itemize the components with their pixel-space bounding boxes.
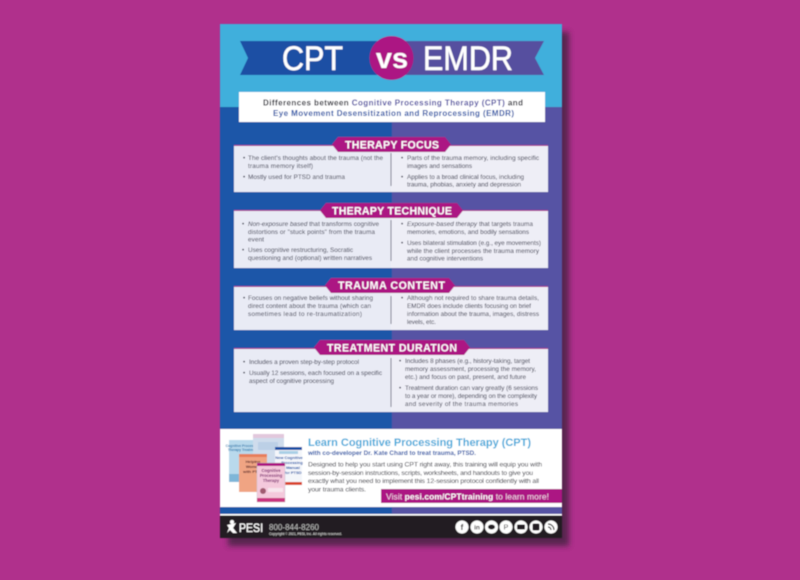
left text: • (243, 295, 245, 302)
subtitle line 1: Differences between Cognitive Processing Therapy (CPT) and (263, 98, 523, 108)
book: orange: with PTSD (242, 469, 263, 474)
promo paragraph: your trauma clients. (308, 486, 366, 494)
book covers (226, 434, 304, 502)
heading: TREATMENT DURATION (327, 342, 457, 354)
vs label: vs (376, 43, 408, 75)
panel: treatment duration: Usually 12 sessions, each focused on a specific (249, 370, 382, 377)
social icons (456, 520, 558, 534)
social icons: f (461, 523, 464, 532)
left text: • (242, 221, 244, 228)
heading: TRAUMA CONTENT (338, 280, 446, 292)
panel: trauma content: levels, etc. (407, 319, 436, 326)
book: front (257, 463, 285, 502)
book: right (275, 447, 304, 485)
panel: treatment duration: Includes a proven step-by-step protocol (249, 359, 359, 366)
heading pill (325, 278, 455, 293)
left text: • (243, 359, 245, 366)
panel: treatment duration: etc.) and focus on past, present, and future (405, 374, 526, 381)
right text: • (399, 358, 401, 365)
panel: therapy focus: trauma memory itself) (248, 163, 313, 170)
panel: therapy technique: Uses bilateral stimulation (e.g., eye movements) (407, 240, 541, 247)
social icons: in (474, 524, 480, 532)
poster (220, 24, 562, 538)
panel: therapy focus: Mostly used for PTSD and trauma (248, 174, 345, 181)
heading pill (314, 340, 470, 355)
heading pill (320, 203, 463, 218)
panel: treatment duration (234, 340, 548, 412)
panel: therapy technique: • (401, 240, 403, 247)
banner right (392, 41, 544, 75)
panel: therapy technique: and cognitive interventions (407, 256, 483, 262)
book: front: Cognitive (261, 468, 281, 473)
book: right: Manual (286, 465, 300, 470)
panel: trauma content: sometimes lead to re-traumatization) (248, 311, 362, 318)
promo paragraph: session-by-session instructions, scripts, worksheets, and handouts to give you (308, 470, 533, 477)
right text: • (401, 295, 403, 302)
vs circle (370, 36, 414, 80)
promo heading: Learn Cognitive Processing Therapy (CPT) (308, 437, 531, 449)
panel: therapy technique (234, 203, 548, 268)
PESI logo: PESI (239, 521, 263, 535)
footer stripe left (220, 507, 392, 514)
panel: therapy technique: questioning and (optional) written narratives (248, 255, 372, 262)
book: back left: Cognitive Processing (226, 444, 260, 448)
banner left (240, 41, 392, 75)
book: right: Processing (281, 460, 303, 465)
panel: therapy technique: Non-exposure based that transforms cognitive (248, 221, 379, 228)
book: back left: Therapy Treatment (228, 448, 259, 452)
book: back left (226, 440, 260, 482)
panel: trauma content: EMDR does include clients focusing on brief (407, 303, 531, 310)
book: back centre (253, 434, 284, 472)
call to action (381, 489, 562, 503)
social icons: P (504, 524, 509, 532)
panel: treatment duration: • (243, 370, 245, 377)
panel: therapy focus: Parts of the trauma memory, including specific (407, 155, 539, 162)
panel: trauma content: Focuses on negative beliefs without sharing (248, 295, 373, 302)
panel: treatment duration: Treatment duration can vary greatly (6 sessions (405, 385, 538, 392)
panel: trauma content (234, 278, 548, 330)
book: orange: Helping (246, 459, 261, 464)
body right background (392, 107, 562, 430)
book: right: New Cognitive (275, 455, 304, 460)
title: EMDR: EMDR (423, 40, 513, 78)
title: CPT: CPT (282, 40, 343, 78)
body left background (220, 107, 392, 430)
panel: treatment duration: aspect of cognitive processing (249, 378, 334, 385)
phone: 800-844-8260 (269, 523, 320, 532)
panel: therapy focus: images and sensations (407, 163, 472, 170)
subtitle box (239, 92, 545, 122)
panel: therapy technique: event (248, 236, 264, 244)
promo paragraph (308, 462, 542, 494)
left text: • (243, 155, 245, 162)
PESI logo (227, 520, 263, 535)
panel: trauma content: information about the trauma, images, distress (407, 311, 539, 318)
panel: trauma content: direct content about the trauma (which can (248, 303, 371, 310)
footer stripe white (220, 514, 562, 516)
book: orange (239, 454, 267, 492)
panel: therapy technique: while the client processes the trauma memory (406, 248, 540, 255)
book: right: for PTSD (284, 470, 302, 475)
panel: therapy technique: distortions or "stuck points" from the trauma (248, 229, 375, 236)
panel: therapy focus: • (401, 174, 403, 181)
panel: therapy technique: memories, emotions, and bodily sensations (407, 229, 529, 236)
book: front: Therapy (263, 478, 280, 483)
right text: • (401, 155, 403, 162)
promo paragraph: Designed to help you start using CPT right away, this training will equip you with (308, 462, 542, 468)
panel: therapy focus (234, 137, 548, 192)
panel: treatment duration: memory assessment, processing the memory, (405, 366, 536, 373)
panel: treatment duration: Includes 8 phases (e.g., history-taking, target (405, 358, 530, 365)
subtitle line 2: Eye Movement Desensitization and Reprocessing (EMDR) (273, 109, 514, 118)
panel: therapy focus: • (243, 174, 245, 181)
panel: therapy technique: Exposure-based therapy that targets trauma (407, 221, 533, 228)
header background (220, 24, 562, 108)
footer stripe right (392, 507, 562, 514)
panel: therapy focus: Applies to a broad clinical focus, including (407, 174, 524, 181)
right text: • (401, 221, 403, 228)
call to action: Visit pesi.com/CPTtraining to learn more! (386, 492, 549, 502)
footer (220, 516, 562, 538)
promo subheading: with co-developer Dr. Kate Chard to treat trauma, PTSD. (307, 450, 476, 457)
book: orange: Women (246, 464, 261, 469)
heading: THERAPY FOCUS (345, 140, 439, 152)
panel: therapy technique: Uses cognitive restructuring, Socratic (248, 247, 353, 254)
heading pill (332, 137, 451, 152)
panel: treatment duration: to a year or more), depending on the complexity (405, 393, 538, 400)
panel: training promo (220, 429, 562, 507)
book: front: Processing (260, 473, 283, 478)
poster shadow (228, 32, 569, 546)
heading: THERAPY TECHNIQUE (332, 206, 452, 218)
panel: treatment duration: • (399, 385, 401, 392)
panel: therapy focus: The client's thoughts about the trauma (not the (248, 155, 383, 162)
panel: therapy technique: • (242, 247, 244, 254)
copyright: Copyright © 2021, PESI, Inc. All rights reserved. (269, 532, 342, 536)
title banner (240, 36, 544, 80)
panel: trauma content: Although not required to share trauma details, (407, 295, 539, 302)
panel: therapy focus: trauma, phobias, anxiety and depression (407, 182, 521, 188)
promo paragraph: exactly what you need to implement this 12-session protocol confidently with all (308, 478, 539, 485)
panel: treatment duration: and severity of the trauma memories (405, 401, 518, 408)
